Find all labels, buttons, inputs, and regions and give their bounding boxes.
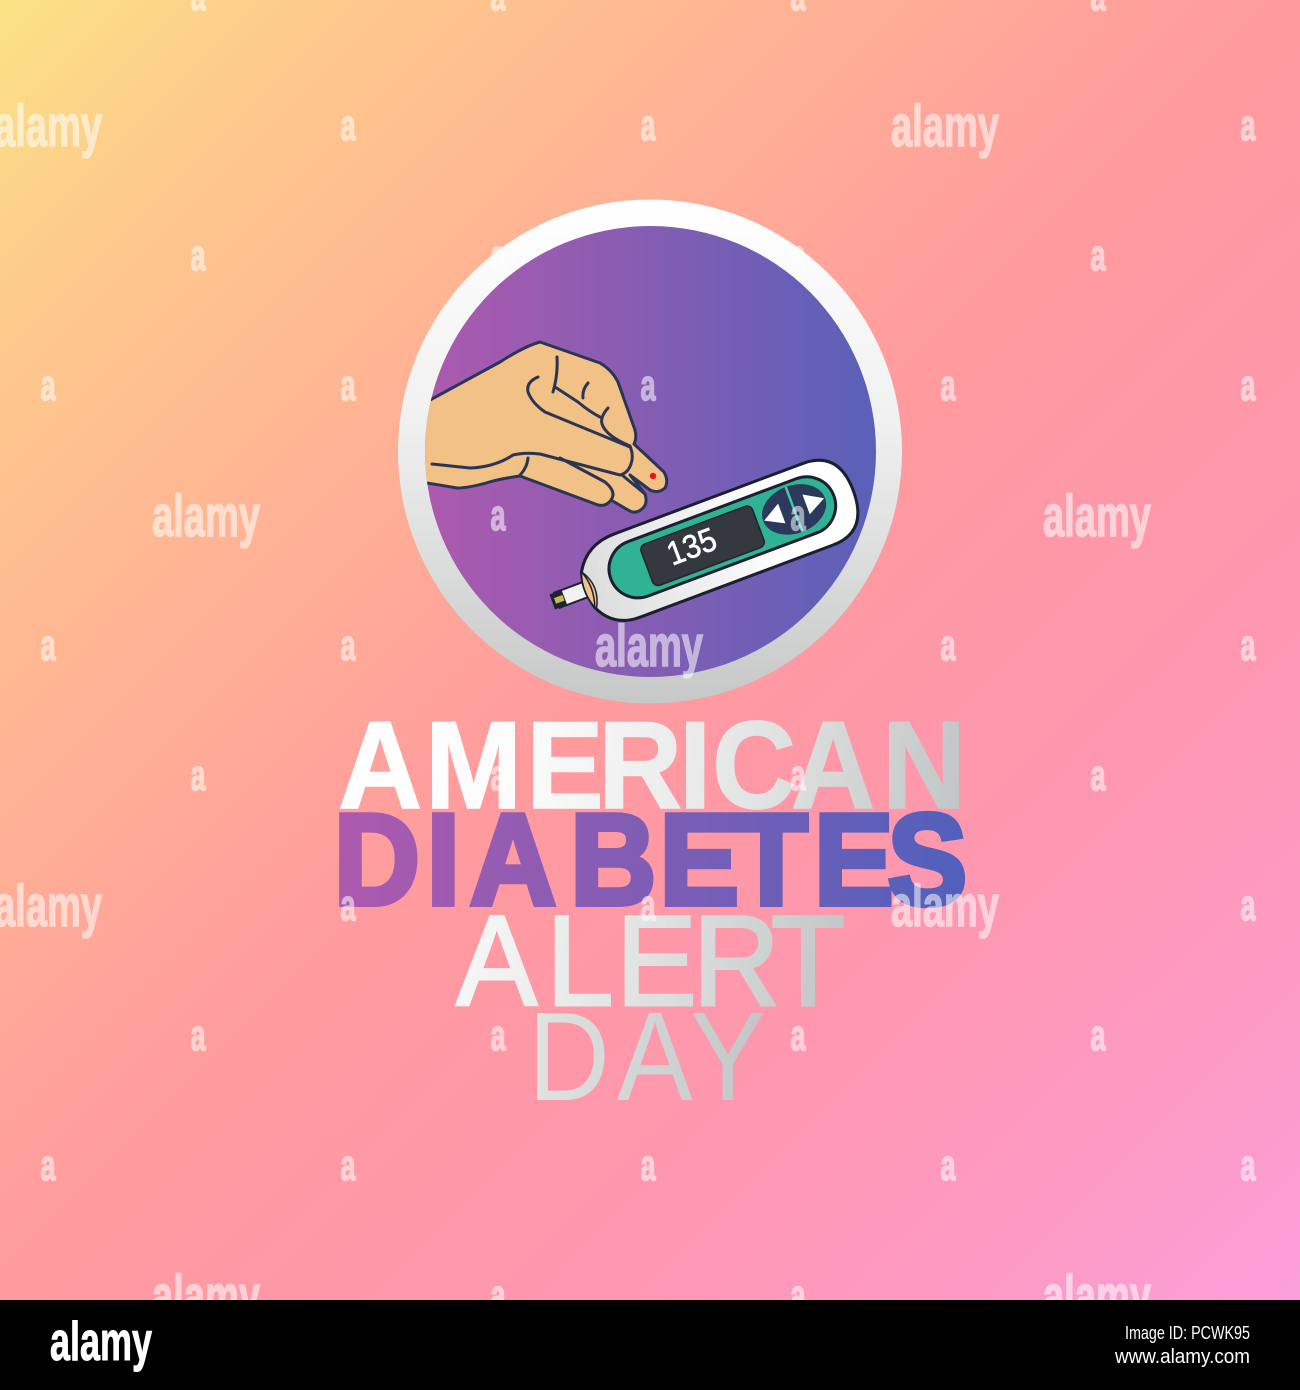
meter body (570, 450, 869, 632)
watermarks: a (640, 101, 656, 150)
reading: 135 (662, 520, 721, 572)
blood drop (650, 473, 656, 479)
screen (639, 504, 766, 587)
footer bar (0, 1300, 1300, 1390)
watermarks: a (940, 361, 956, 410)
watermarks: a (1240, 621, 1256, 670)
badge ring (398, 200, 902, 704)
watermarks: a (340, 881, 356, 930)
watermarks: a (1240, 881, 1256, 930)
watermarks: alamy (595, 614, 703, 679)
badge disc (425, 226, 876, 677)
watermarks: a (190, 231, 206, 280)
footer logo: alamy (50, 1310, 152, 1372)
watermarks: a (790, 231, 806, 280)
title (334, 697, 967, 1127)
icon: hand with pricked finger (418, 342, 667, 512)
watermarks: a (340, 621, 356, 670)
watermarks: a (190, 1011, 206, 1060)
watermarks: alamy (152, 484, 260, 549)
watermarks: a (940, 1141, 956, 1190)
button pad (755, 475, 833, 543)
watermarks: alamy (1043, 484, 1151, 549)
image id: Image ID: PCWK95 (1125, 1323, 1250, 1343)
watermarks: a (490, 751, 506, 800)
watermarks: alamy (1043, 1264, 1151, 1329)
test strip (549, 578, 599, 609)
watermarks: a (340, 1141, 356, 1190)
watermarks: a (1240, 361, 1256, 410)
watermarks: a (790, 1271, 806, 1320)
watermarks: a (490, 1011, 506, 1060)
watermarks: alamy (891, 94, 999, 159)
heading: Day: DAY (528, 986, 766, 1127)
watermarks: a (190, 751, 206, 800)
watermarks: a (1090, 1011, 1106, 1060)
watermarks: alamy (152, 1264, 260, 1329)
watermarks: a (1240, 1141, 1256, 1190)
watermarks: a (640, 361, 656, 410)
watermarks: a (490, 491, 506, 540)
watermarks: a (340, 101, 356, 150)
circular badge (398, 200, 902, 704)
watermarks: alamy (891, 874, 999, 939)
watermarks: a (490, 1271, 506, 1320)
watermarks: a (340, 361, 356, 410)
watermarks: a (1090, 751, 1106, 800)
website: www.alamy.com (1114, 1346, 1250, 1368)
green panel (601, 468, 844, 606)
heading: Diabetes: DIABETES (334, 788, 967, 932)
watermarks: a (790, 491, 806, 540)
watermarks: a (940, 621, 956, 670)
watermarks: a (40, 1141, 56, 1190)
strip port (578, 569, 602, 611)
watermarks: a (790, 1011, 806, 1060)
watermarks: a (40, 361, 56, 410)
icon: glucose meter (538, 450, 869, 644)
watermarks: a (640, 1141, 656, 1190)
watermarks: a (40, 621, 56, 670)
watermarks: a (790, 751, 806, 800)
watermarks: a (490, 231, 506, 280)
heading: American: AMERICAN (338, 697, 966, 835)
watermarks: a (1240, 101, 1256, 150)
watermarks: a (1090, 231, 1106, 280)
watermarks: a (640, 881, 656, 930)
heading: Alert: ALERT (456, 890, 845, 1033)
